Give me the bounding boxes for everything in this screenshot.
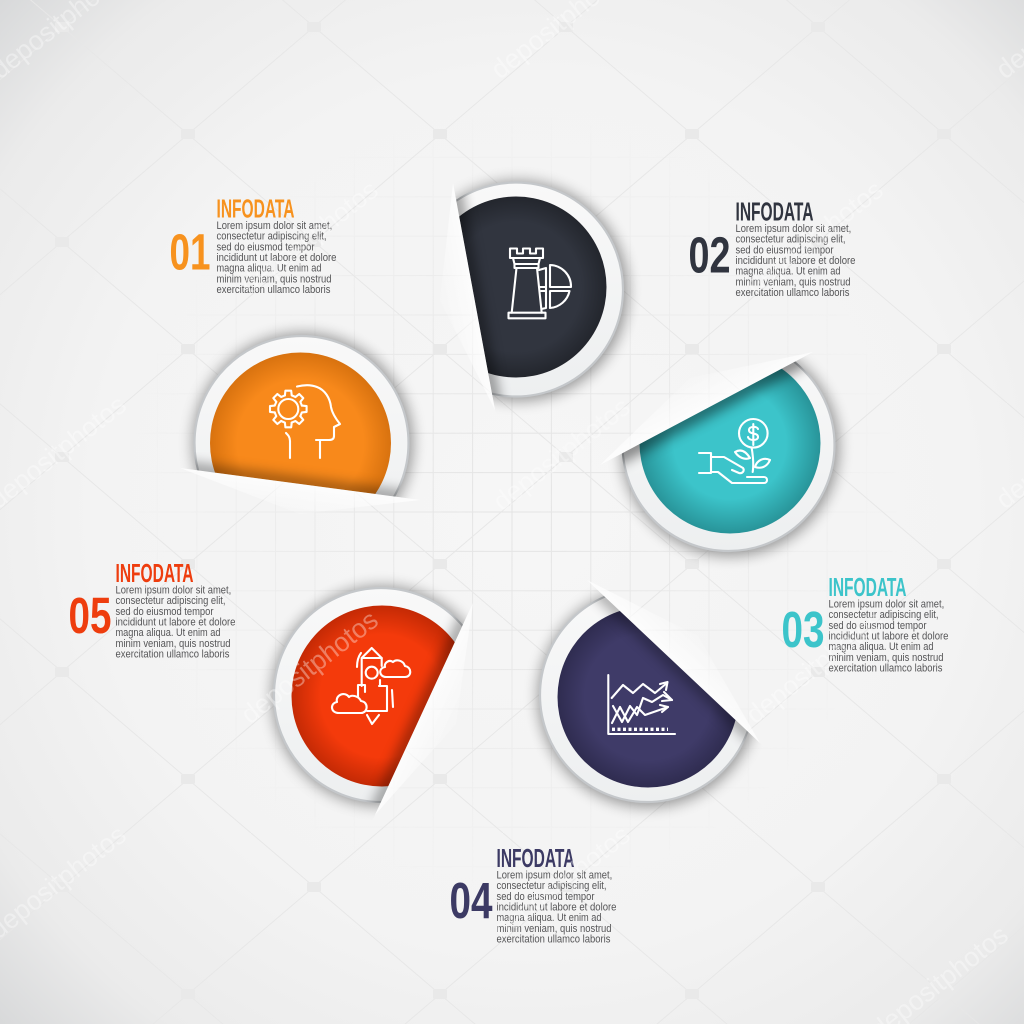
text block: 05: minim veniam, quis nostrud xyxy=(116,638,231,650)
watermark: depositphotos xyxy=(235,175,384,300)
text block: 04: magna aliqua. Ut enim ad xyxy=(496,912,602,924)
text block: 05: incididunt ut labore et dolore xyxy=(116,616,236,628)
text block: 04 xyxy=(450,843,617,946)
text block: 05: INFODATA xyxy=(116,558,194,588)
text block: 02 xyxy=(688,196,856,299)
text block: 02: incididunt ut labore et dolore xyxy=(736,255,856,267)
text block: 01: magna aliqua. Ut enim ad xyxy=(216,263,322,275)
text block: 02: INFODATA xyxy=(736,196,814,226)
text block: 03: consectetur adipiscing elit, xyxy=(828,609,938,621)
icon: line chart with arrows xyxy=(608,675,675,734)
text block: 01: incididunt ut labore et dolore xyxy=(216,252,337,264)
text block: 04: INFODATA xyxy=(496,843,575,873)
icon: hand with money plant xyxy=(699,419,770,483)
panel: step 3 circle (teal) xyxy=(600,338,839,556)
text block: 01: 01 xyxy=(170,224,210,280)
text block: 01 xyxy=(170,194,337,296)
icon: rocket and clouds xyxy=(332,648,410,724)
text block: 02: sed do eiusmod tempor xyxy=(736,244,834,256)
text block: 01: exercitation ullamco laboris xyxy=(216,284,330,296)
text block: 01: minim veniam, quis nostrud xyxy=(216,273,332,285)
text block: 03: magna aliqua. Ut enim ad xyxy=(828,641,934,653)
text block: 03: exercitation ullamco laboris xyxy=(828,662,942,674)
text block: 05: exercitation ullamco laboris xyxy=(116,648,230,660)
text block: 03: Lorem ipsum dolor sit amet, xyxy=(828,598,944,610)
icon: head with gear xyxy=(270,385,340,458)
text block: 05: consectetur adipiscing elit, xyxy=(116,595,226,607)
text block: 02: minim veniam, quis nostrud xyxy=(736,276,851,288)
text block: 01: sed do eiusmod tempor xyxy=(216,241,315,253)
text block: 04: exercitation ullamco laboris xyxy=(496,934,610,946)
text block: 05: 05 xyxy=(68,587,112,644)
text block: 04: Lorem ipsum dolor sit amet, xyxy=(496,870,612,882)
watermark: depositphotos xyxy=(487,392,636,517)
text block: 02: Lorem ipsum dolor sit amet, xyxy=(736,223,851,235)
watermark: depositphotos xyxy=(235,605,384,730)
text block: 03 xyxy=(782,572,949,674)
text block: 04: 04 xyxy=(450,872,493,929)
panel: step 1 circle (orange) xyxy=(182,324,422,508)
panel: step 5 circle (red) xyxy=(272,586,492,815)
watermark: depositphotos xyxy=(487,820,636,945)
text block: 04: consectetur adipiscing elit, xyxy=(496,880,606,892)
text block: 02: magna aliqua. Ut enim ad xyxy=(736,266,841,278)
text block: 04: incididunt ut labore et dolore xyxy=(496,902,617,914)
text block: 04: minim veniam, quis nostrud xyxy=(496,923,612,935)
icon: chess rook with pie chart xyxy=(508,248,571,318)
text block: 05: sed do eiusmod tempor xyxy=(116,606,214,618)
text block: 02: consectetur adipiscing elit, xyxy=(736,234,846,246)
text block: 03: incididunt ut labore et dolore xyxy=(828,630,949,642)
text block: 04: sed do eiusmod tempor xyxy=(496,891,595,903)
text block: 05: magna aliqua. Ut enim ad xyxy=(116,627,221,639)
text block: 03: INFODATA xyxy=(828,572,907,602)
text block: 01: consectetur adipiscing elit, xyxy=(216,231,326,243)
text block: 02: 02 xyxy=(688,226,730,284)
text block: 05: Lorem ipsum dolor sit amet, xyxy=(116,584,231,596)
text block: 01: Lorem ipsum dolor sit amet, xyxy=(216,220,332,232)
text block: 03: sed do eiusmod tempor xyxy=(828,620,927,632)
watermark: depositphotos xyxy=(740,175,889,300)
text block: 05 xyxy=(68,558,236,660)
text block: 03: 03 xyxy=(782,601,824,658)
text block: 02: exercitation ullamco laboris xyxy=(736,287,850,299)
text block: 01: INFODATA xyxy=(216,194,295,224)
text block: 03: minim veniam, quis nostrud xyxy=(828,652,944,664)
panel: step 2 circle (dark) xyxy=(448,172,636,410)
watermark: depositphotos xyxy=(740,605,889,730)
panel: step 4 circle (navy) xyxy=(538,580,760,807)
